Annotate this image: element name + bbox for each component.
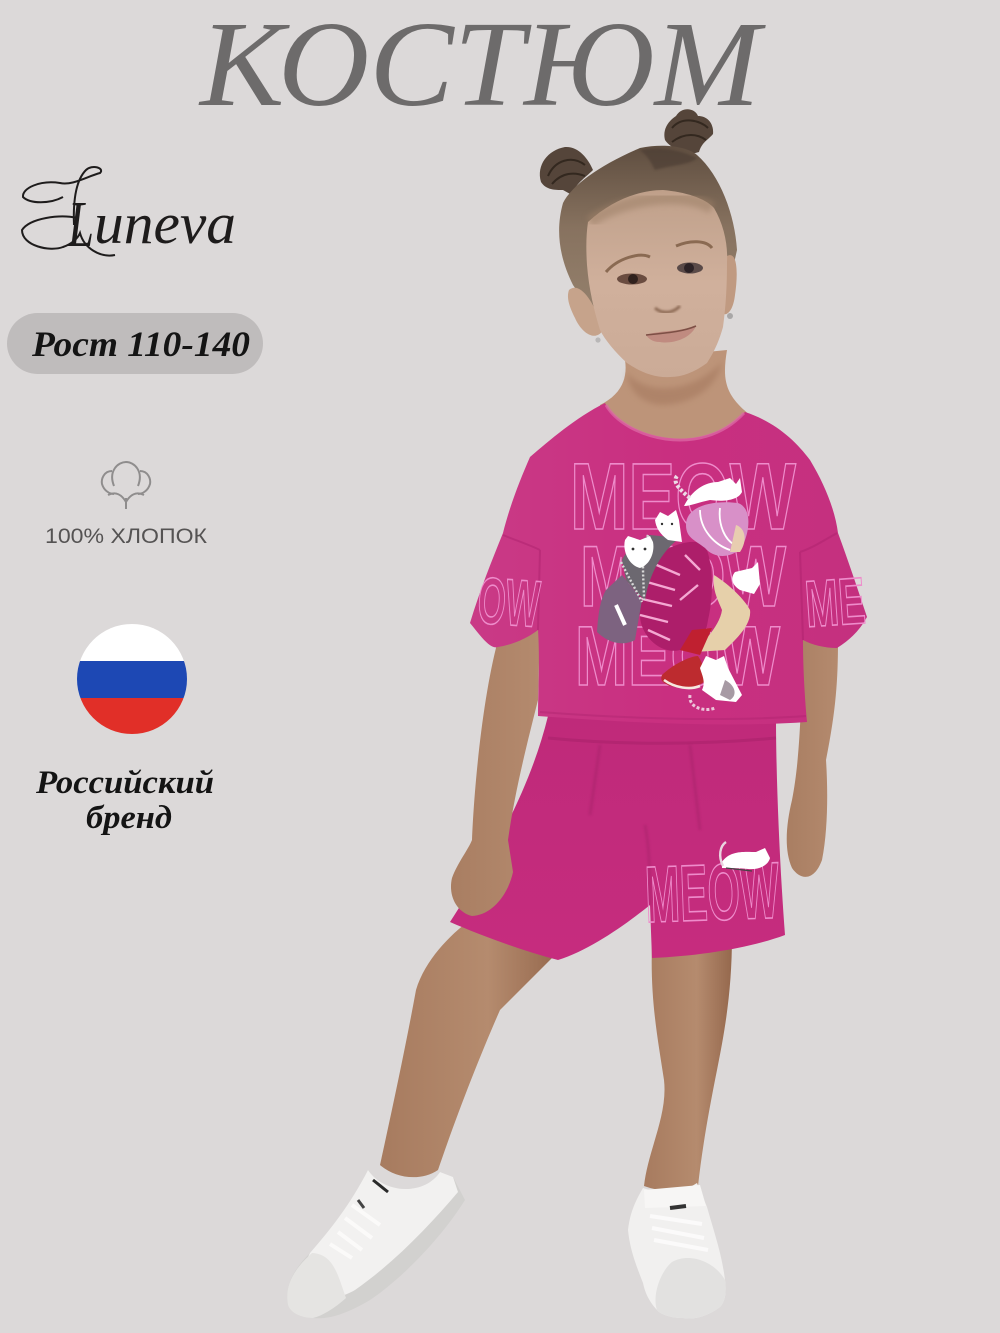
sleeve meow prints: OW [475,563,543,641]
jacket [634,542,712,651]
mouth [646,326,696,342]
brand logo: L [67,188,94,261]
red sneaker [661,656,705,688]
cat in backpack [624,536,653,568]
shorts [450,716,785,960]
right arm [787,635,838,877]
hair buns [540,109,713,195]
right sneaker [628,1183,726,1319]
eyebrows [606,242,712,272]
sleeve meow prints [475,563,868,641]
legs [380,920,732,1190]
head [540,109,737,377]
anime girl print [597,476,760,709]
red shorts [680,628,712,655]
bottom cat [700,656,742,702]
left arm [451,625,540,916]
legs [695,575,750,652]
brand logo [22,167,236,261]
pink hair [686,502,748,556]
icon: cotton boll [102,462,150,509]
backpack [597,575,642,643]
sleeve meow prints: ME [803,563,868,641]
nose [655,306,680,312]
child model wearing the suit [287,109,868,1319]
earrings [595,337,601,343]
size badge [7,313,263,374]
held cat [732,562,760,594]
eyes [617,262,703,284]
face [586,190,727,377]
hair [559,146,737,310]
cat on head [684,478,742,506]
material label: 100% ХЛОПОК [45,524,208,548]
brand logo: uneva [94,191,236,256]
forehead hairline shade [590,198,712,222]
hair part shading [640,148,697,170]
meow outline rows: MEOW [570,444,796,550]
brand origin label: бренд [86,800,172,836]
cat on shoulder [655,510,682,542]
ears [568,288,603,336]
shorts meow print: MEOW [644,846,781,939]
brand origin label: Российский [35,765,214,801]
meow outline rows: MEOW [575,609,781,703]
size badge: Рост 110-140 [31,324,250,364]
meow outline rows: MEOW [580,529,787,625]
t-shirt [470,403,868,724]
shorts cat print [720,842,770,871]
sleeve seams and folds [503,533,837,640]
title: КОСТЮМ [198,0,767,132]
left sneaker [287,1170,465,1318]
meow outline rows [570,444,796,703]
neck shadow [626,362,722,405]
collar band [606,405,744,440]
icon: russian flag [77,624,187,734]
neck [600,350,750,460]
